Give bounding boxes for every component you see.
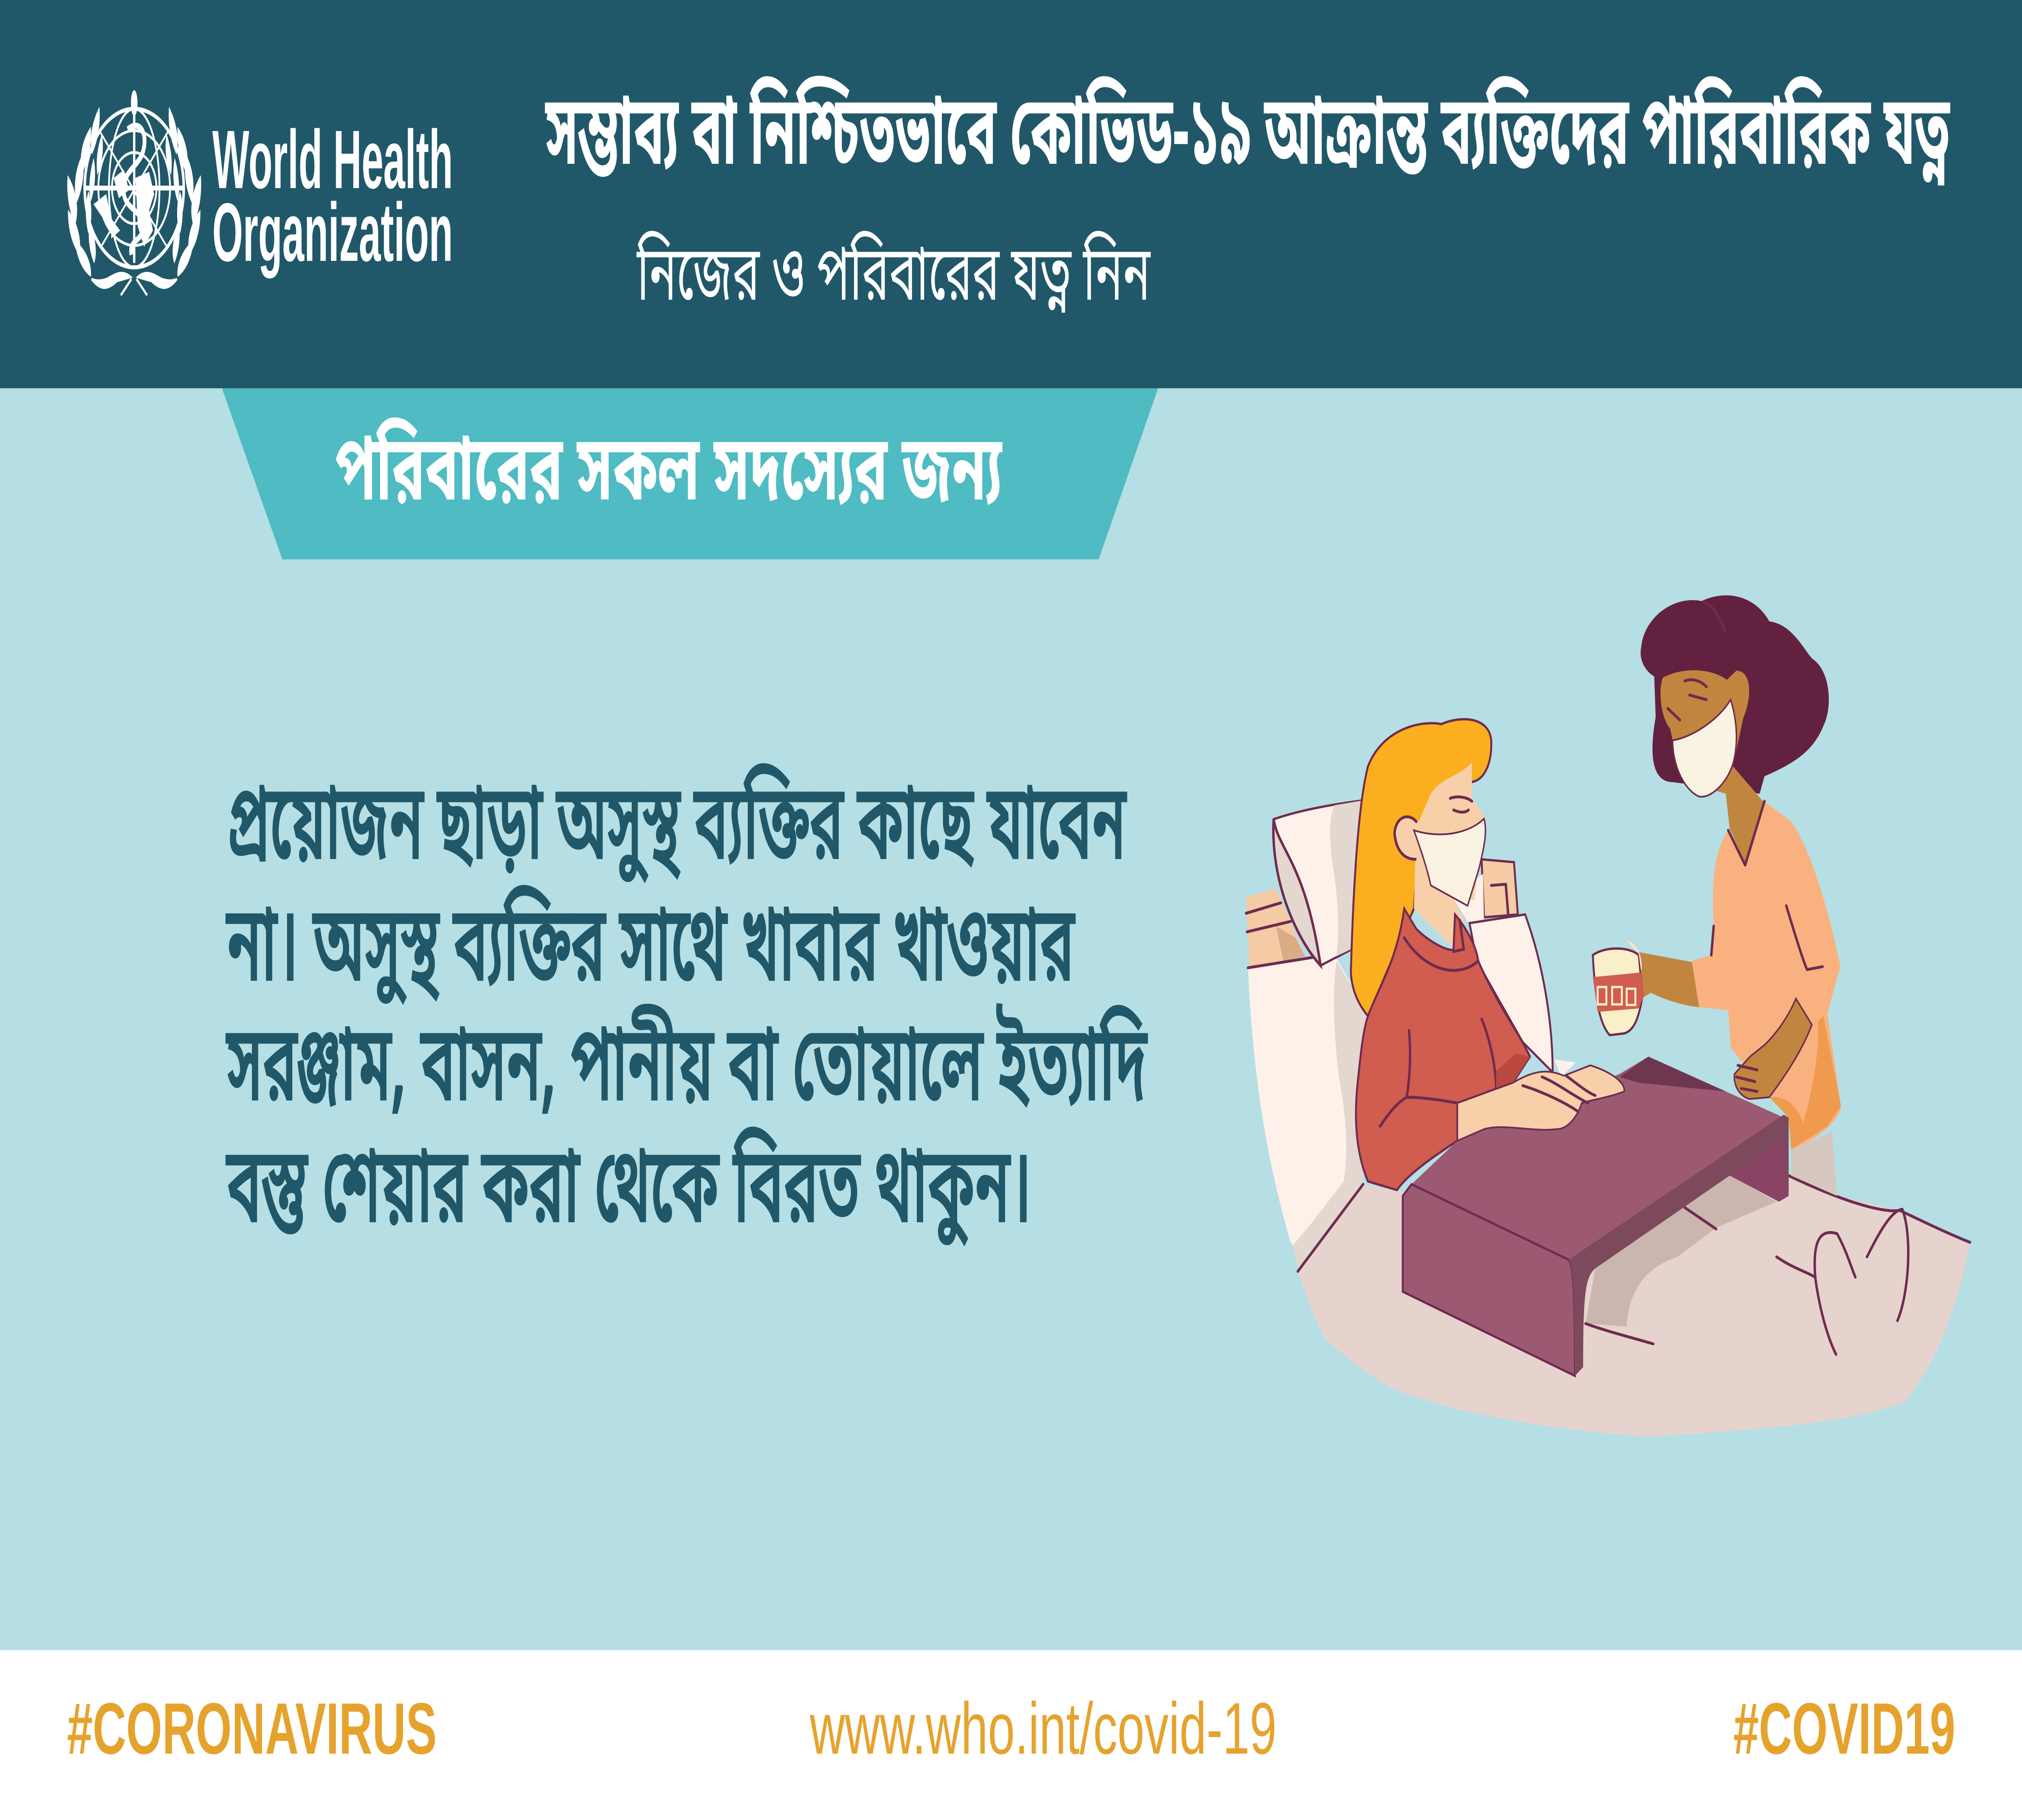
mask (1673, 700, 1736, 797)
standing carer (1639, 595, 1841, 1196)
face and neck (1660, 670, 1764, 863)
banner (222, 388, 1158, 559)
hair (1351, 719, 1491, 1016)
bed tray (1403, 1057, 1789, 1376)
body text block: না। অসুস্থ ব্যক্তির সাথে খাবার খাওয়ার (226, 885, 1075, 1021)
mask (1414, 819, 1485, 906)
trousers (1791, 1132, 1837, 1196)
backrest and pillows (1248, 801, 1576, 1268)
icon: WHO emblem (68, 90, 201, 295)
illustration: carer bringing a drink to a sick person in bed (1246, 595, 1970, 1437)
headboard (1246, 859, 1518, 967)
sweater (1356, 909, 1530, 1190)
banner text: পরিবারের সকল সদস্যের জন্য (335, 416, 1003, 537)
blanket (1298, 1176, 1970, 1437)
WHO logo (68, 90, 453, 295)
body text block (226, 763, 1147, 1263)
patient's hands on the tray (1457, 1065, 1624, 1141)
hashtag: covid19: #COVID19 (1733, 1688, 1955, 1769)
arm holding the mug (1639, 952, 1699, 1007)
icon: mug (1593, 941, 1643, 1035)
seated patient (1351, 719, 1530, 1190)
logo wordmark: Organization (212, 186, 453, 279)
subtitle: নিজের ও পরিবারের যত্ন নিন (637, 229, 1151, 331)
header band (0, 0, 2022, 388)
face and neck (1394, 762, 1484, 949)
body text block: প্রয়োজন ছাড়া অসুস্থ ব্যক্তির কাছে যাবেন (227, 763, 1127, 899)
logo wordmark: World Health (212, 113, 453, 206)
hair (1641, 595, 1829, 794)
footer band (0, 1650, 2022, 1820)
body text block: সরঞ্জাম, বাসন, পানীয় বা তোয়ালে ইত্যাদি (226, 1004, 1147, 1141)
website: www.who.int/covid-19 (810, 1687, 1277, 1769)
logo wordmark (212, 113, 453, 279)
body text block: বস্তু শেয়ার করা থেকে বিরত থাকুন। (226, 1126, 1032, 1263)
hashtag: coronavirus: #CORONAVIRUS (67, 1688, 437, 1769)
lower arm and hand (1734, 999, 1812, 1099)
shirt (1692, 801, 1841, 1149)
shadow under tray (1586, 1176, 1777, 1327)
